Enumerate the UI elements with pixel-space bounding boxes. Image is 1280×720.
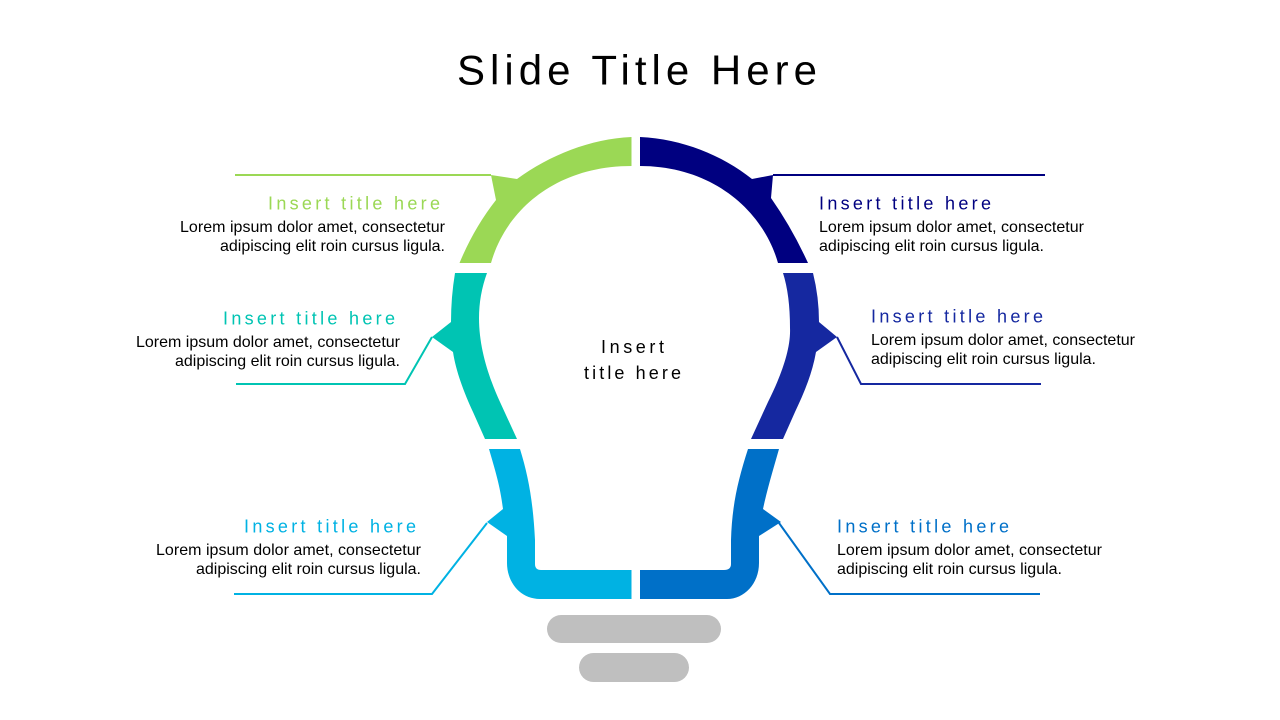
text block: navy (819, 194, 1085, 255)
text block: blue: Insert title here (837, 516, 1009, 536)
text block: blue (837, 516, 1103, 578)
text block: green (180, 194, 446, 255)
text block: teal: Lorem ipsum dolor amet, consectetur (136, 334, 401, 351)
center label: title here (584, 363, 681, 383)
leader line: green (235, 174, 491, 176)
text block: green: adipiscing elit roin cursus ligula. (220, 238, 445, 255)
text block: navy: adipiscing elit roin cursus ligula. (819, 238, 1044, 255)
leader line: teal (236, 337, 432, 384)
text block: green: Insert title here (268, 194, 440, 214)
text block: cyan: adipiscing elit roin cursus ligula. (196, 561, 421, 578)
text block: cyan: Insert title here (244, 516, 416, 536)
leader line: royal blue (837, 337, 1041, 384)
text block: royal blue (871, 306, 1136, 368)
center label (584, 337, 681, 383)
bulb base: upper bar (547, 615, 721, 643)
text block: royal blue: Lorem ipsum dolor amet, consectetur (871, 332, 1136, 349)
segment: navy top right (640, 137, 808, 263)
text block: cyan (156, 516, 422, 578)
text block: navy: Insert title here (819, 194, 991, 214)
leader line: navy (773, 174, 1045, 176)
text block: green: Lorem ipsum dolor amet, consectetur (180, 219, 446, 236)
center label: Insert (601, 337, 664, 357)
title: Slide Title Here (457, 46, 817, 94)
bulb base: lower bar (579, 653, 689, 682)
text block: cyan: Lorem ipsum dolor amet, consectetur (156, 542, 422, 559)
lightbulb diagram (432, 137, 837, 682)
leader line: cyan (234, 523, 487, 594)
text block: teal: adipiscing elit roin cursus ligula. (175, 353, 400, 370)
text block: navy: Lorem ipsum dolor amet, consectetur (819, 219, 1085, 236)
text block: royal blue: Insert title here (871, 306, 1043, 326)
text block: blue: adipiscing elit roin cursus ligula. (837, 561, 1062, 578)
text block: royal blue: adipiscing elit roin cursus ligula. (871, 351, 1096, 368)
leader line: blue (779, 523, 1040, 594)
segment: cyan bottom left (487, 449, 632, 599)
segment: teal middle left (432, 273, 517, 439)
text block: blue: Lorem ipsum dolor amet, consectetur (837, 542, 1103, 559)
segment: blue bottom right (640, 449, 781, 599)
text block: teal (136, 308, 401, 370)
text block: teal: Insert title here (223, 308, 395, 328)
segment: green top left (460, 137, 632, 263)
segment: royal blue middle right (751, 273, 837, 439)
